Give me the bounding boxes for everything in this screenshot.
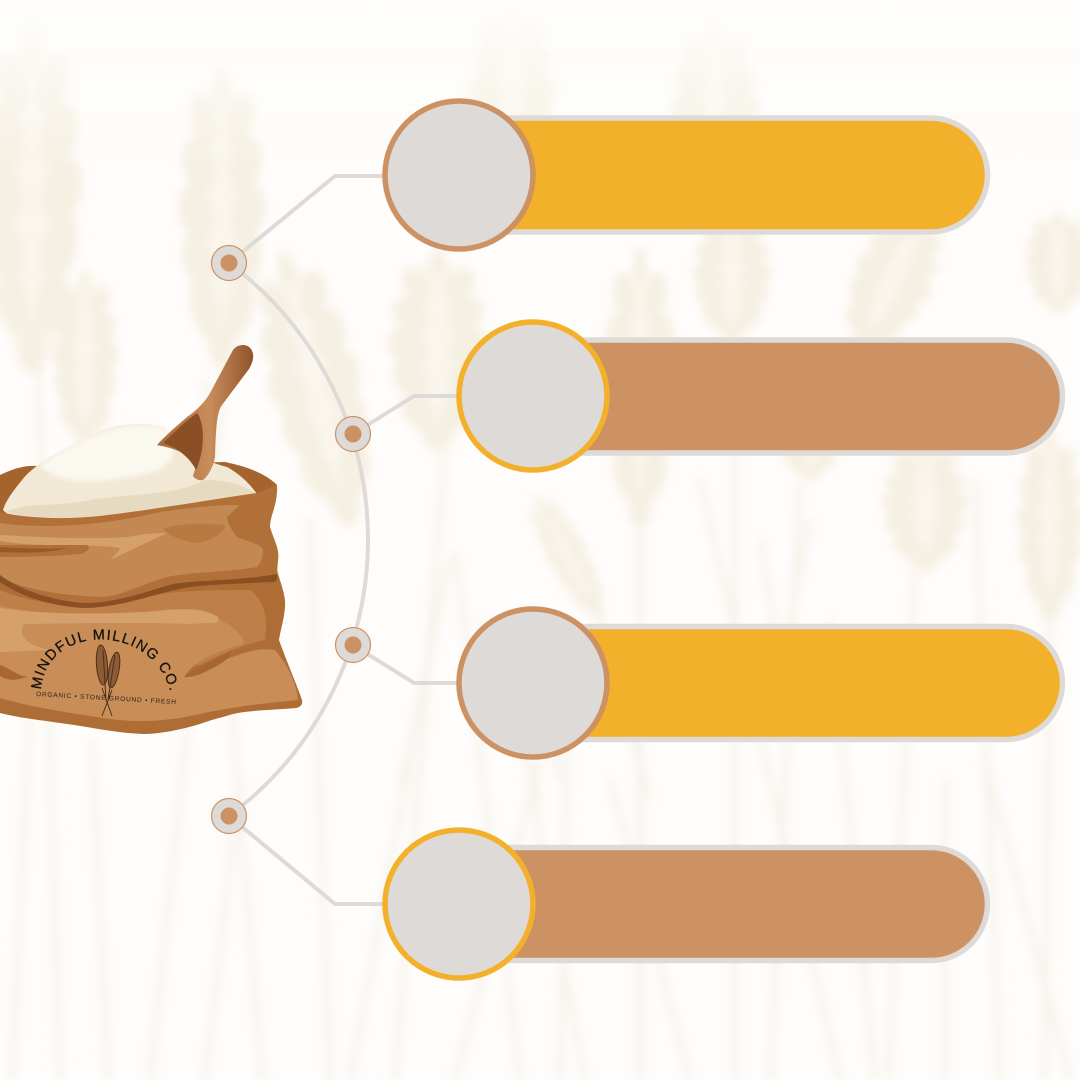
sack logo: wheat sprig (95, 645, 122, 716)
wooden scoop (157, 345, 253, 480)
connector: node 4 to item 4 (229, 816, 400, 904)
flour mound (3, 424, 257, 520)
sack lower body (0, 570, 302, 734)
sack logo: tagline: ORGANIC • STONE GROUND • FRESH (36, 691, 176, 706)
item 1: amber bar with circle (385, 101, 988, 249)
sack back rim (0, 462, 277, 525)
connector: node 1 to item 1 (229, 176, 400, 263)
item 2: tan bar with circle (459, 322, 1062, 470)
item 3: amber bar with circle (459, 609, 1062, 757)
item 4: tan bar with circle (385, 830, 988, 978)
sack upper fold (0, 485, 278, 603)
node 4 (212, 798, 246, 834)
arc connecting nodes (229, 263, 368, 816)
node 1 (212, 246, 246, 280)
node 2 (336, 416, 370, 452)
illustration: flour sack with scoop (0, 345, 302, 734)
node 3 (336, 628, 370, 662)
sack fold shadow (0, 574, 277, 608)
connector: node 2 to item 2 (353, 396, 470, 434)
sack logo: arched brand name: MINDFUL MILLING CO. (31, 629, 177, 690)
connector: node 3 to item 3 (353, 645, 470, 683)
